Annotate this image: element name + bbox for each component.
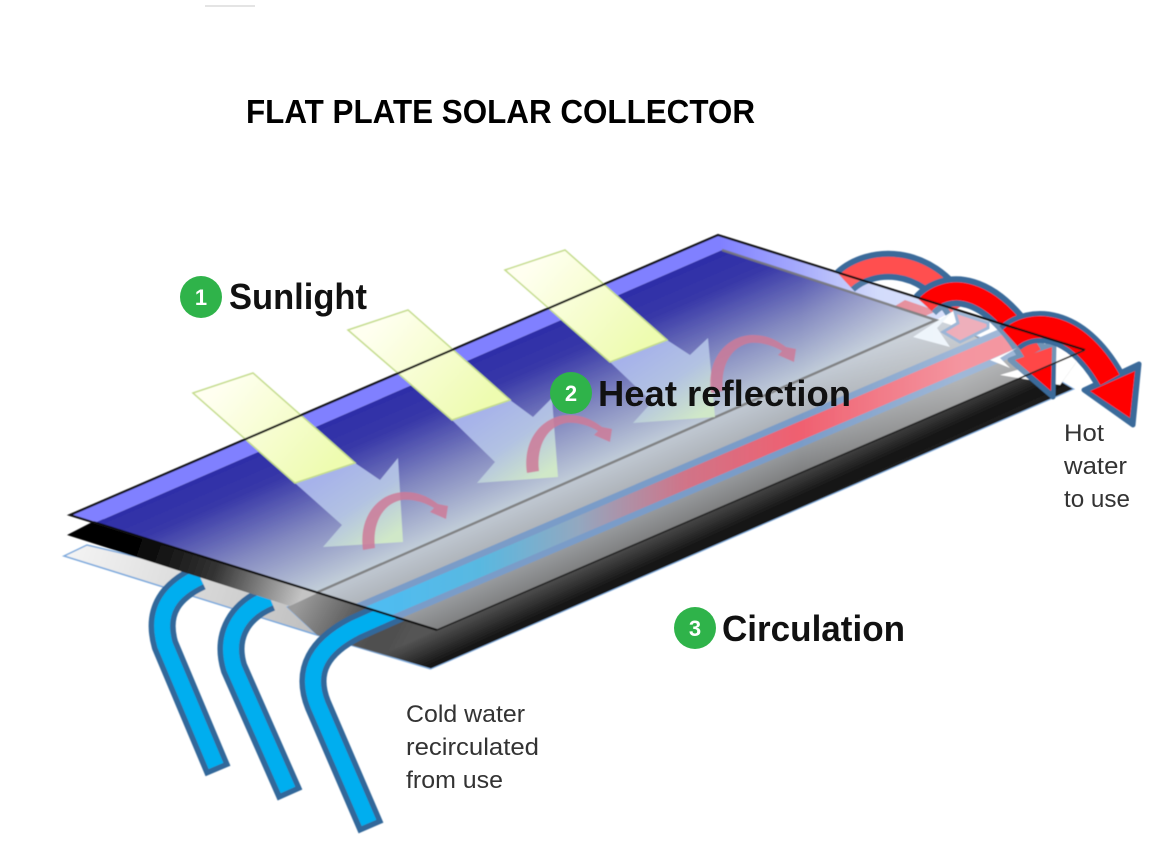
text: hot water to use: to use [1064,486,1130,513]
cold inlet pipe 1 [162,577,218,771]
cold inlet pipe 3 [313,607,402,828]
sunlight arrow 2 [348,310,558,483]
glass outline [70,235,1085,630]
lower panel under glass [318,320,1085,630]
sunlight arrow 1 [193,373,403,547]
text: cold water recirculated from use: from use [406,767,503,794]
cold inlet pipe 2 [231,598,290,795]
label: circulation: 3 [689,616,701,641]
absorber plate left shading [287,593,437,660]
pipe stripe [360,337,1020,619]
title: FLAT PLATE SOLAR COLLECTOR [246,93,755,130]
sunlight arrow 3 [505,250,715,423]
absorber plate [287,318,1074,669]
label: circulation: Circulation [722,608,905,649]
blue inner panel [97,250,936,592]
text: cold water recirculated from use [406,701,539,794]
white right corner [1000,350,1085,385]
hot water arrow 1 [845,265,958,308]
white chevron 2 [990,348,1017,368]
label: sunlight: Sunlight [229,276,367,317]
text: cold water recirculated from use: Cold water [406,701,525,728]
lilac tint under arrow [895,300,937,316]
hot water arrow 3 [1010,327,1139,425]
back sheet [64,545,431,669]
glass sheet overlay [70,235,1085,630]
label: sunlight [180,276,367,318]
label: heat reflection: 2 [565,381,577,406]
text: cold water recirculated from use: recirculated [406,734,539,761]
text: hot water to use: Hot [1064,420,1104,447]
collector diagram [64,235,1139,828]
heat reflection arrow 2 [526,415,612,473]
heat reflection arrow 1 [362,492,448,550]
text: hot water to use [1063,420,1130,513]
label: heat reflection: Heat reflection [598,373,851,414]
inner panel outline [318,250,936,592]
purple glass band [70,235,955,522]
white chevron [913,312,952,347]
label: sunlight: 1 [195,285,207,310]
text: hot water to use: water [1063,453,1127,480]
arrow 1 head under glass [943,312,988,342]
hot water arrow 2 [925,291,1054,397]
black sheet [67,518,320,606]
top scan mark [205,5,255,7]
heat reflection arrow 3 [710,335,796,393]
